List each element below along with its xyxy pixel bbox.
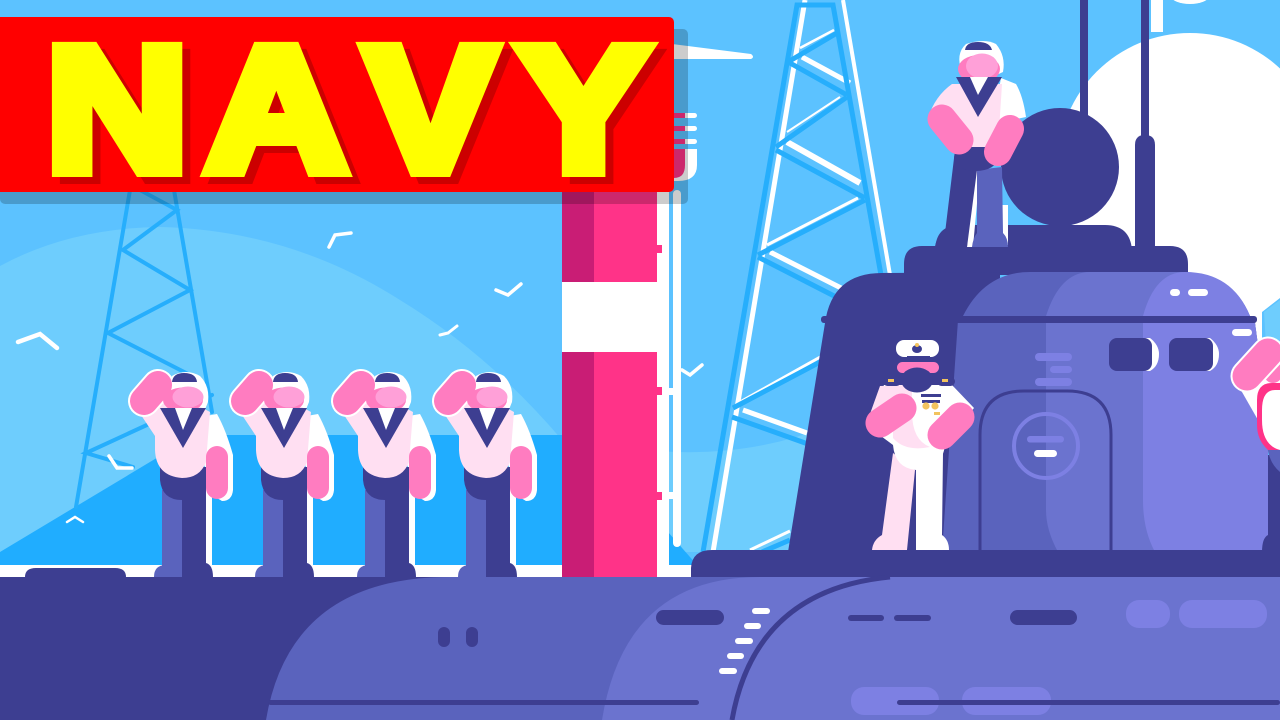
periscope dome (1001, 108, 1119, 226)
saluting sailor 4 (443, 372, 537, 577)
captain legs (872, 453, 915, 550)
conning tower body (821, 272, 1268, 552)
white sun circle (1058, 0, 1280, 375)
lookout sailor on tower (928, 41, 1026, 247)
funnel mast (562, 44, 753, 577)
submarine hull (0, 577, 1280, 720)
captain face and beard (897, 362, 939, 373)
hull front section (266, 577, 1280, 720)
hull lines (268, 700, 699, 705)
tower top lights (1170, 289, 1252, 336)
banner shadow (0, 29, 688, 204)
title text shadow: NAVY (55, 19, 657, 215)
captain (866, 340, 974, 550)
captain hat (896, 340, 939, 357)
antennas (1080, 0, 1155, 246)
saluting sailor 2 (240, 372, 334, 577)
wall bars (1035, 353, 1072, 386)
title banner (0, 12, 674, 215)
hull mid section (602, 577, 1280, 720)
birds (18, 233, 702, 522)
hull seam curve (732, 577, 890, 720)
conning tower navy sail (788, 272, 1000, 552)
hatch door (980, 391, 1111, 552)
hull white markers (719, 608, 770, 674)
saluting sailor 1 (139, 372, 233, 577)
background hill (0, 227, 562, 566)
left lattice tower (76, 190, 212, 507)
right lattice tower (703, 0, 890, 552)
deck white strip (0, 565, 562, 577)
tower band (821, 316, 1257, 323)
saluting sailor 3 (342, 372, 436, 577)
medals (921, 394, 941, 397)
sea (0, 435, 562, 566)
hull vents (438, 627, 450, 647)
title text: NAVY (47, 12, 649, 208)
windows (1109, 338, 1219, 371)
small deck hatch (25, 568, 126, 577)
deck platform (691, 550, 1280, 577)
right partial sailor (1238, 353, 1280, 552)
hull light panels (1126, 600, 1170, 628)
epaulettes (883, 377, 901, 386)
captain arms (880, 408, 902, 423)
hull navy pills (656, 610, 724, 625)
captain torso (866, 385, 974, 470)
conning tower upper tiers (904, 225, 1188, 275)
right background hill (657, 425, 830, 552)
